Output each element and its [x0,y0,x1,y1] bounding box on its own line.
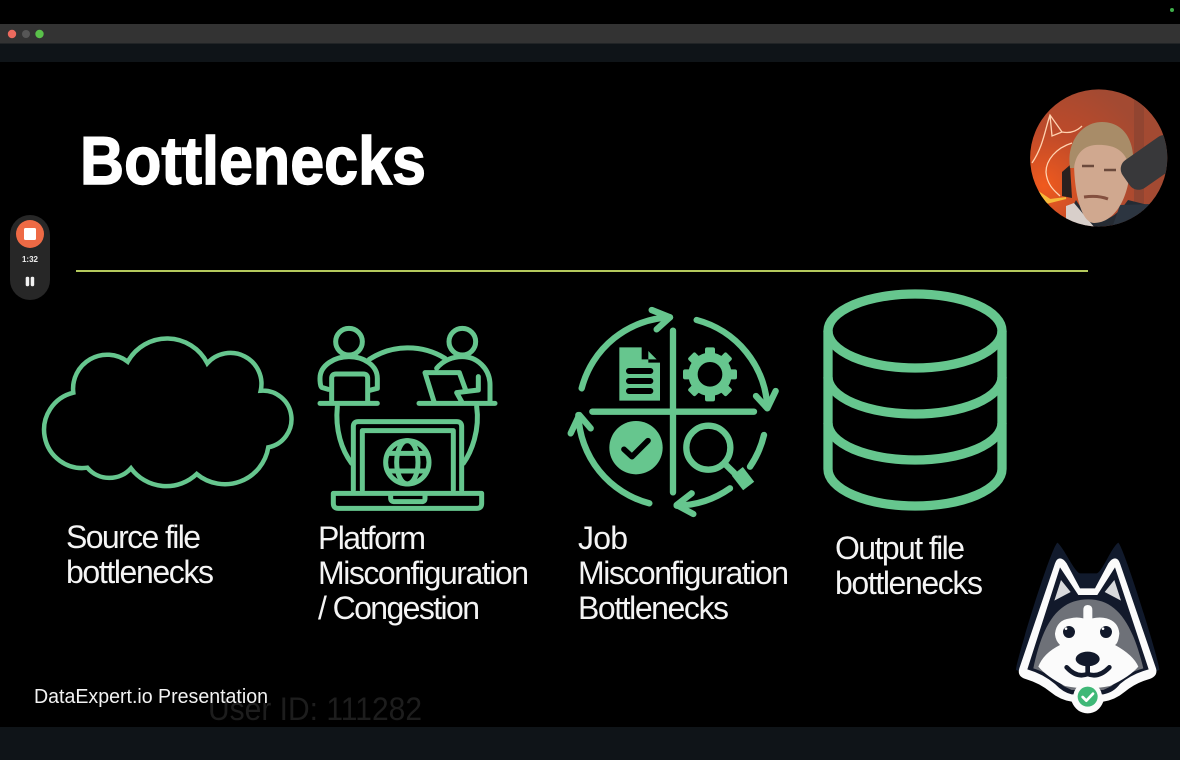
label: source file: bottlenecks [66,554,214,590]
title: Bottlenecks [80,123,426,199]
label: job: Bottlenecks [578,590,729,626]
footer text: DataExpert.io Presentation [34,686,268,708]
label: source file: Source file [66,519,201,555]
presenter webcam avatar [1030,89,1168,227]
divider line [76,270,1088,272]
husky logo [1016,543,1159,713]
bottom bar [0,727,1180,760]
recording widget [10,215,50,300]
label: job [578,520,789,626]
label: platform [318,520,529,626]
recording widget: 1:32 [22,255,39,264]
database icon [828,294,1002,506]
label: platform: Platform [318,520,426,556]
window title bar [0,8,1180,62]
cloud icon [44,338,291,486]
platform icon [320,328,495,508]
label: platform: / Congestion [318,590,480,626]
job cycle icon [571,310,776,514]
label: job: Job [578,520,628,556]
label: output file [835,530,983,601]
label: platform: Misconfiguration [318,555,529,591]
label: job: Misconfiguration [578,555,789,591]
label: output file: Output file [835,530,965,566]
label: output file: bottlenecks [835,565,983,601]
label: source file [66,519,214,590]
watermark: user id: User ID: 111282 [208,691,422,727]
